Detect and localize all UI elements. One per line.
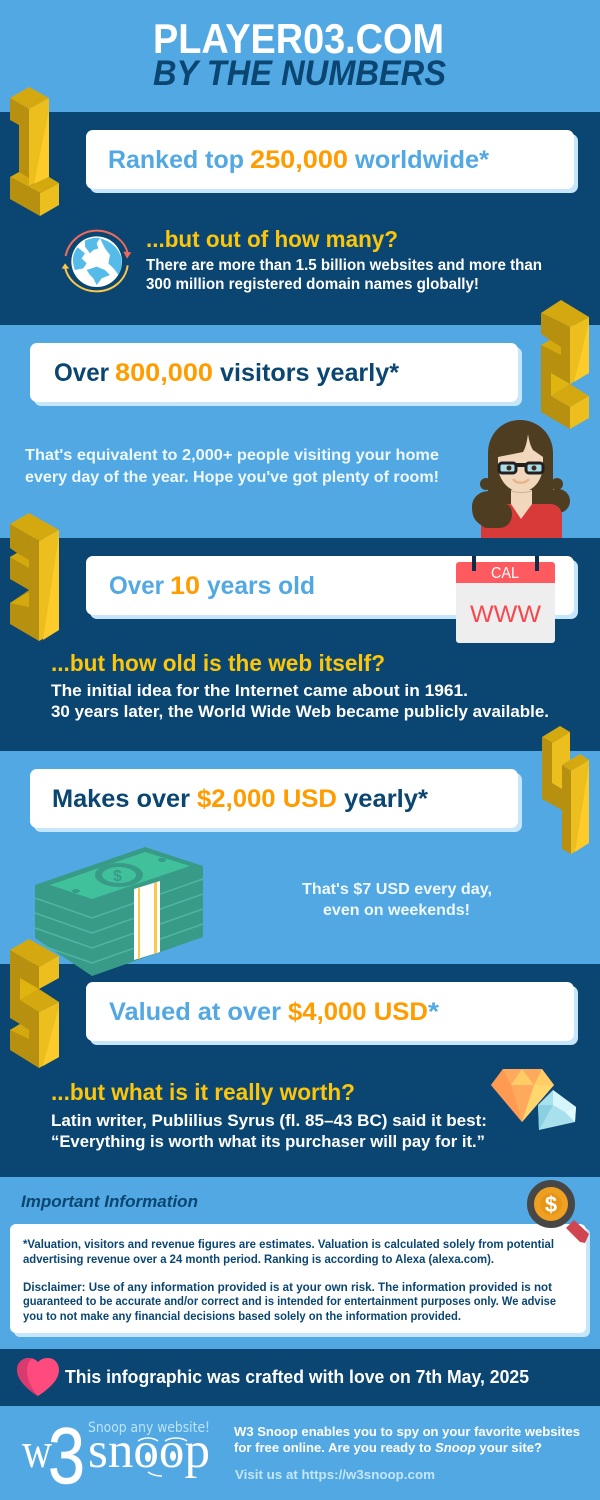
text: what is it really worth (51, 1079, 487, 1151)
panel: age card: Over (109, 572, 164, 600)
text: but out of how many: 300 million registered domain names globally! (146, 276, 479, 293)
text: visitors explanation: every day of the year. Hope you've got plenty of room! (25, 469, 439, 486)
panel: rank card: Ranked top (108, 146, 244, 174)
text: how old is the web (51, 650, 549, 721)
text: w3snoop description: for free online. Are you ready to Snoop your site? (234, 1440, 542, 1455)
text: w3snoop description (234, 1424, 580, 1482)
panel: revenue card: Makes over (52, 785, 190, 813)
icon: calendar: CAL (491, 565, 519, 582)
panel: visitors card: 800,000 (115, 359, 213, 387)
logo: w3snoop: Snoop any website! (88, 1420, 210, 1436)
text: how old is the web: The initial idea for the Internet came about in 1961. (51, 682, 468, 700)
icon: number 5 (10, 939, 59, 1068)
panel: value card: $4,000 USD (288, 998, 428, 1026)
text: crafted with love: This infographic was crafted with love on 7th May, 2025 (65, 1366, 529, 1387)
text: but out of how many: ...but out of how many? (146, 226, 398, 252)
text: w3snoop description: W3 Snoop enables you to spy on your favorite websites (234, 1424, 580, 1439)
panel: rank card: worldwide* (354, 146, 489, 174)
text: how old is the web: 30 years later, the World Wide Web became publicly available. (51, 703, 549, 721)
text: visitors explanation: That's equivalent to 2,000+ people visiting your home (25, 447, 439, 464)
icon: number 3 (10, 513, 59, 641)
text: seven dollars a day (302, 881, 492, 919)
title: PLAYER03.COM (153, 15, 444, 62)
panel: age card: years old (207, 572, 315, 600)
panel: visitors card (30, 343, 522, 406)
panel: value card: * (428, 998, 439, 1026)
icon: calendar: WWW (470, 601, 541, 628)
panel: age card: 10 (170, 572, 200, 600)
text: what is it really worth: “Everything is worth what its purchaser will pay for it.” (51, 1133, 485, 1151)
panel: visitors card: visitors yearly* (220, 359, 399, 387)
panel: rank card: 250,000 (250, 146, 348, 174)
icon: woman with glasses (472, 420, 570, 538)
icon: diamonds (491, 1069, 576, 1130)
icon: number 1 (10, 87, 59, 216)
text: but out of how many: There are more than 1.5 billion websites and more than (146, 257, 542, 274)
text: how old is the web: ...but how old is the web itself? (51, 650, 385, 676)
panel: disclaimer: you to not make any financial decisions based solely on the information provided. (23, 1311, 461, 1323)
panel: disclaimer: Disclaimer: Use of any information provided is at your own risk. The information provided is not (23, 1282, 552, 1294)
logo: w3snoop: w (22, 1422, 52, 1478)
panel: disclaimer (10, 1224, 590, 1337)
title: BY THE NUMBERS (153, 54, 446, 93)
text: what is it really worth: Latin writer, Publilius Syrus (fl. 85–43 BC) said it best: (51, 1112, 487, 1130)
panel: visitors card: Over (54, 359, 109, 387)
icon: magnifier with dollar (530, 1184, 589, 1243)
heading: important information: Important Information (21, 1192, 198, 1211)
logo: w3snoop: snoop (88, 1423, 210, 1479)
panel: rank card (86, 130, 578, 193)
panel: value card: Valued at over (109, 998, 281, 1026)
logo: w3snoop: 3 (48, 1411, 85, 1500)
panel: revenue card: yearly* (344, 785, 428, 813)
title (153, 15, 446, 93)
icon: globe with arrows (62, 231, 131, 291)
icon: heart (17, 1358, 59, 1396)
text: visitors explanation (25, 447, 439, 486)
icon: calendar (456, 556, 555, 643)
icon: number 4 (542, 726, 589, 854)
text: seven dollars a day: even on weekends! (323, 902, 470, 919)
icon: magnifier with dollar: $ (545, 1192, 557, 1217)
panel: revenue card: $2,000 USD (197, 785, 337, 813)
panel: revenue card (30, 769, 522, 832)
icon: stack of money: $ (113, 868, 122, 885)
panel: age card (86, 556, 578, 619)
panel: value card (86, 982, 578, 1045)
text: w3snoop description: Visit us at https://w3snoop.com (235, 1467, 435, 1482)
text: what is it really worth: ...but what is it really worth? (51, 1079, 355, 1105)
text: but out of how many (146, 226, 542, 293)
panel: disclaimer: guaranteed to be accurate and/or correct and is intended for entertainment purposes only. We advise (23, 1296, 556, 1308)
panel: disclaimer: advertising revenue over a 24 month period. Ranking is according to Alexa (alexa.com). (23, 1254, 494, 1266)
icon: number 2 (541, 300, 589, 429)
text: seven dollars a day: That's $7 USD every day, (302, 881, 492, 898)
icon: stack of money (35, 847, 203, 976)
logo: w3snoop (22, 1411, 210, 1500)
panel: disclaimer: *Valuation, visitors and revenue figures are estimates. Valuation is calculated solely from potential (23, 1239, 554, 1251)
